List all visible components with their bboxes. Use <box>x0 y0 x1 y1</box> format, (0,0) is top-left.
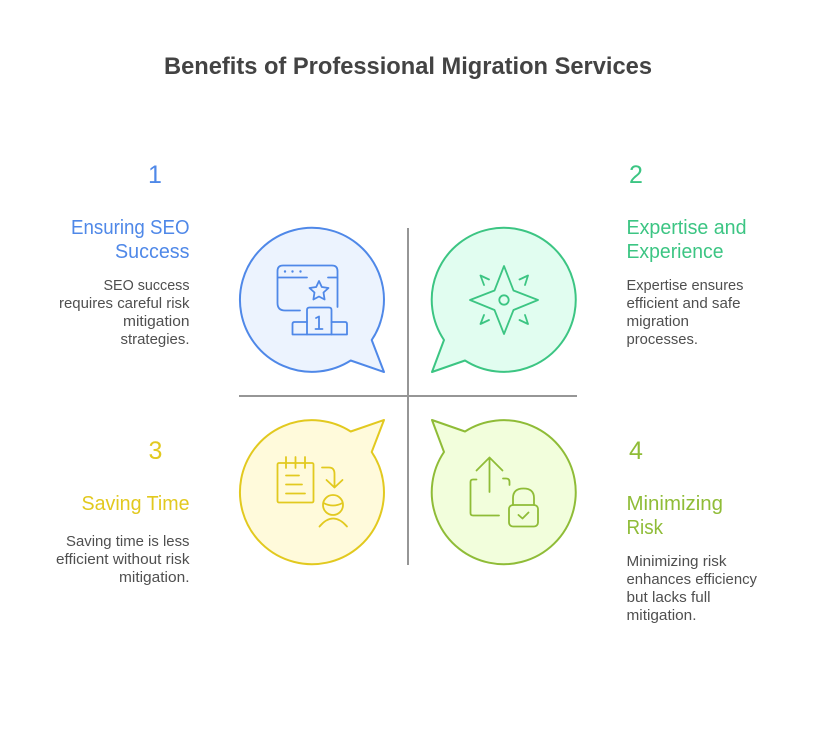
number 1: 1 <box>148 161 162 189</box>
text block: Expertise: efficient and safe <box>626 296 740 312</box>
heading: Ensuring SEO Success: Success <box>115 241 190 263</box>
icon: compass star <box>470 266 538 334</box>
heading: Expertise and Experience: Expertise and <box>626 217 746 239</box>
heading: Minimizing Risk: Risk <box>626 517 664 539</box>
text block: SEO success <box>59 278 190 348</box>
text block: SEO success: mitigation <box>123 314 190 330</box>
quadrant divider lines <box>239 228 577 565</box>
text block: Expertise: processes. <box>626 332 698 348</box>
text block: Minimizing risk <box>626 554 758 624</box>
text block: Saving time: Saving time is less <box>66 534 190 550</box>
title: Benefits of Professional Migration Services <box>164 53 652 80</box>
text block: Saving time <box>56 534 190 586</box>
heading: Ensuring SEO Success <box>71 217 190 263</box>
heading: Minimizing Risk: Minimizing <box>626 493 723 515</box>
number 2: 2 <box>629 161 643 189</box>
speech bubble 1: blue <box>240 228 384 372</box>
speech bubble 2: green <box>432 228 576 372</box>
icon: upload arrow and padlock <box>470 458 538 526</box>
text block: Expertise <box>626 278 744 348</box>
heading: Expertise and Experience <box>626 217 746 263</box>
text block: Expertise: Expertise ensures <box>626 278 744 294</box>
number 4: 4 <box>629 437 643 465</box>
number 3: 3 <box>149 437 162 465</box>
text block: Minimizing risk: but lacks full <box>626 590 710 606</box>
icon: calendar notes and person <box>278 457 347 526</box>
text block: Expertise: migration <box>626 314 689 330</box>
text block: Minimizing risk: enhances efficiency <box>626 572 758 588</box>
text block: Saving time: efficient without risk <box>56 552 190 568</box>
text block: Minimizing risk: Minimizing risk <box>626 554 727 570</box>
speech bubble 4: lime <box>432 420 576 564</box>
heading: Saving Time: Saving Time <box>82 493 190 515</box>
heading: Minimizing Risk <box>626 493 723 539</box>
text block: SEO success: requires careful risk <box>59 296 190 312</box>
speech bubble 3: yellow <box>240 420 384 564</box>
text block: Minimizing risk: mitigation. <box>626 608 696 624</box>
text block: SEO success: strategies. <box>120 332 190 348</box>
icon: browser window with star and podium <box>278 266 347 334</box>
heading: Ensuring SEO Success: Ensuring SEO <box>71 217 190 239</box>
heading: Expertise and Experience: Experience <box>626 241 724 263</box>
text block: SEO success: SEO success <box>104 278 190 294</box>
text block: Saving time: mitigation. <box>119 570 190 586</box>
